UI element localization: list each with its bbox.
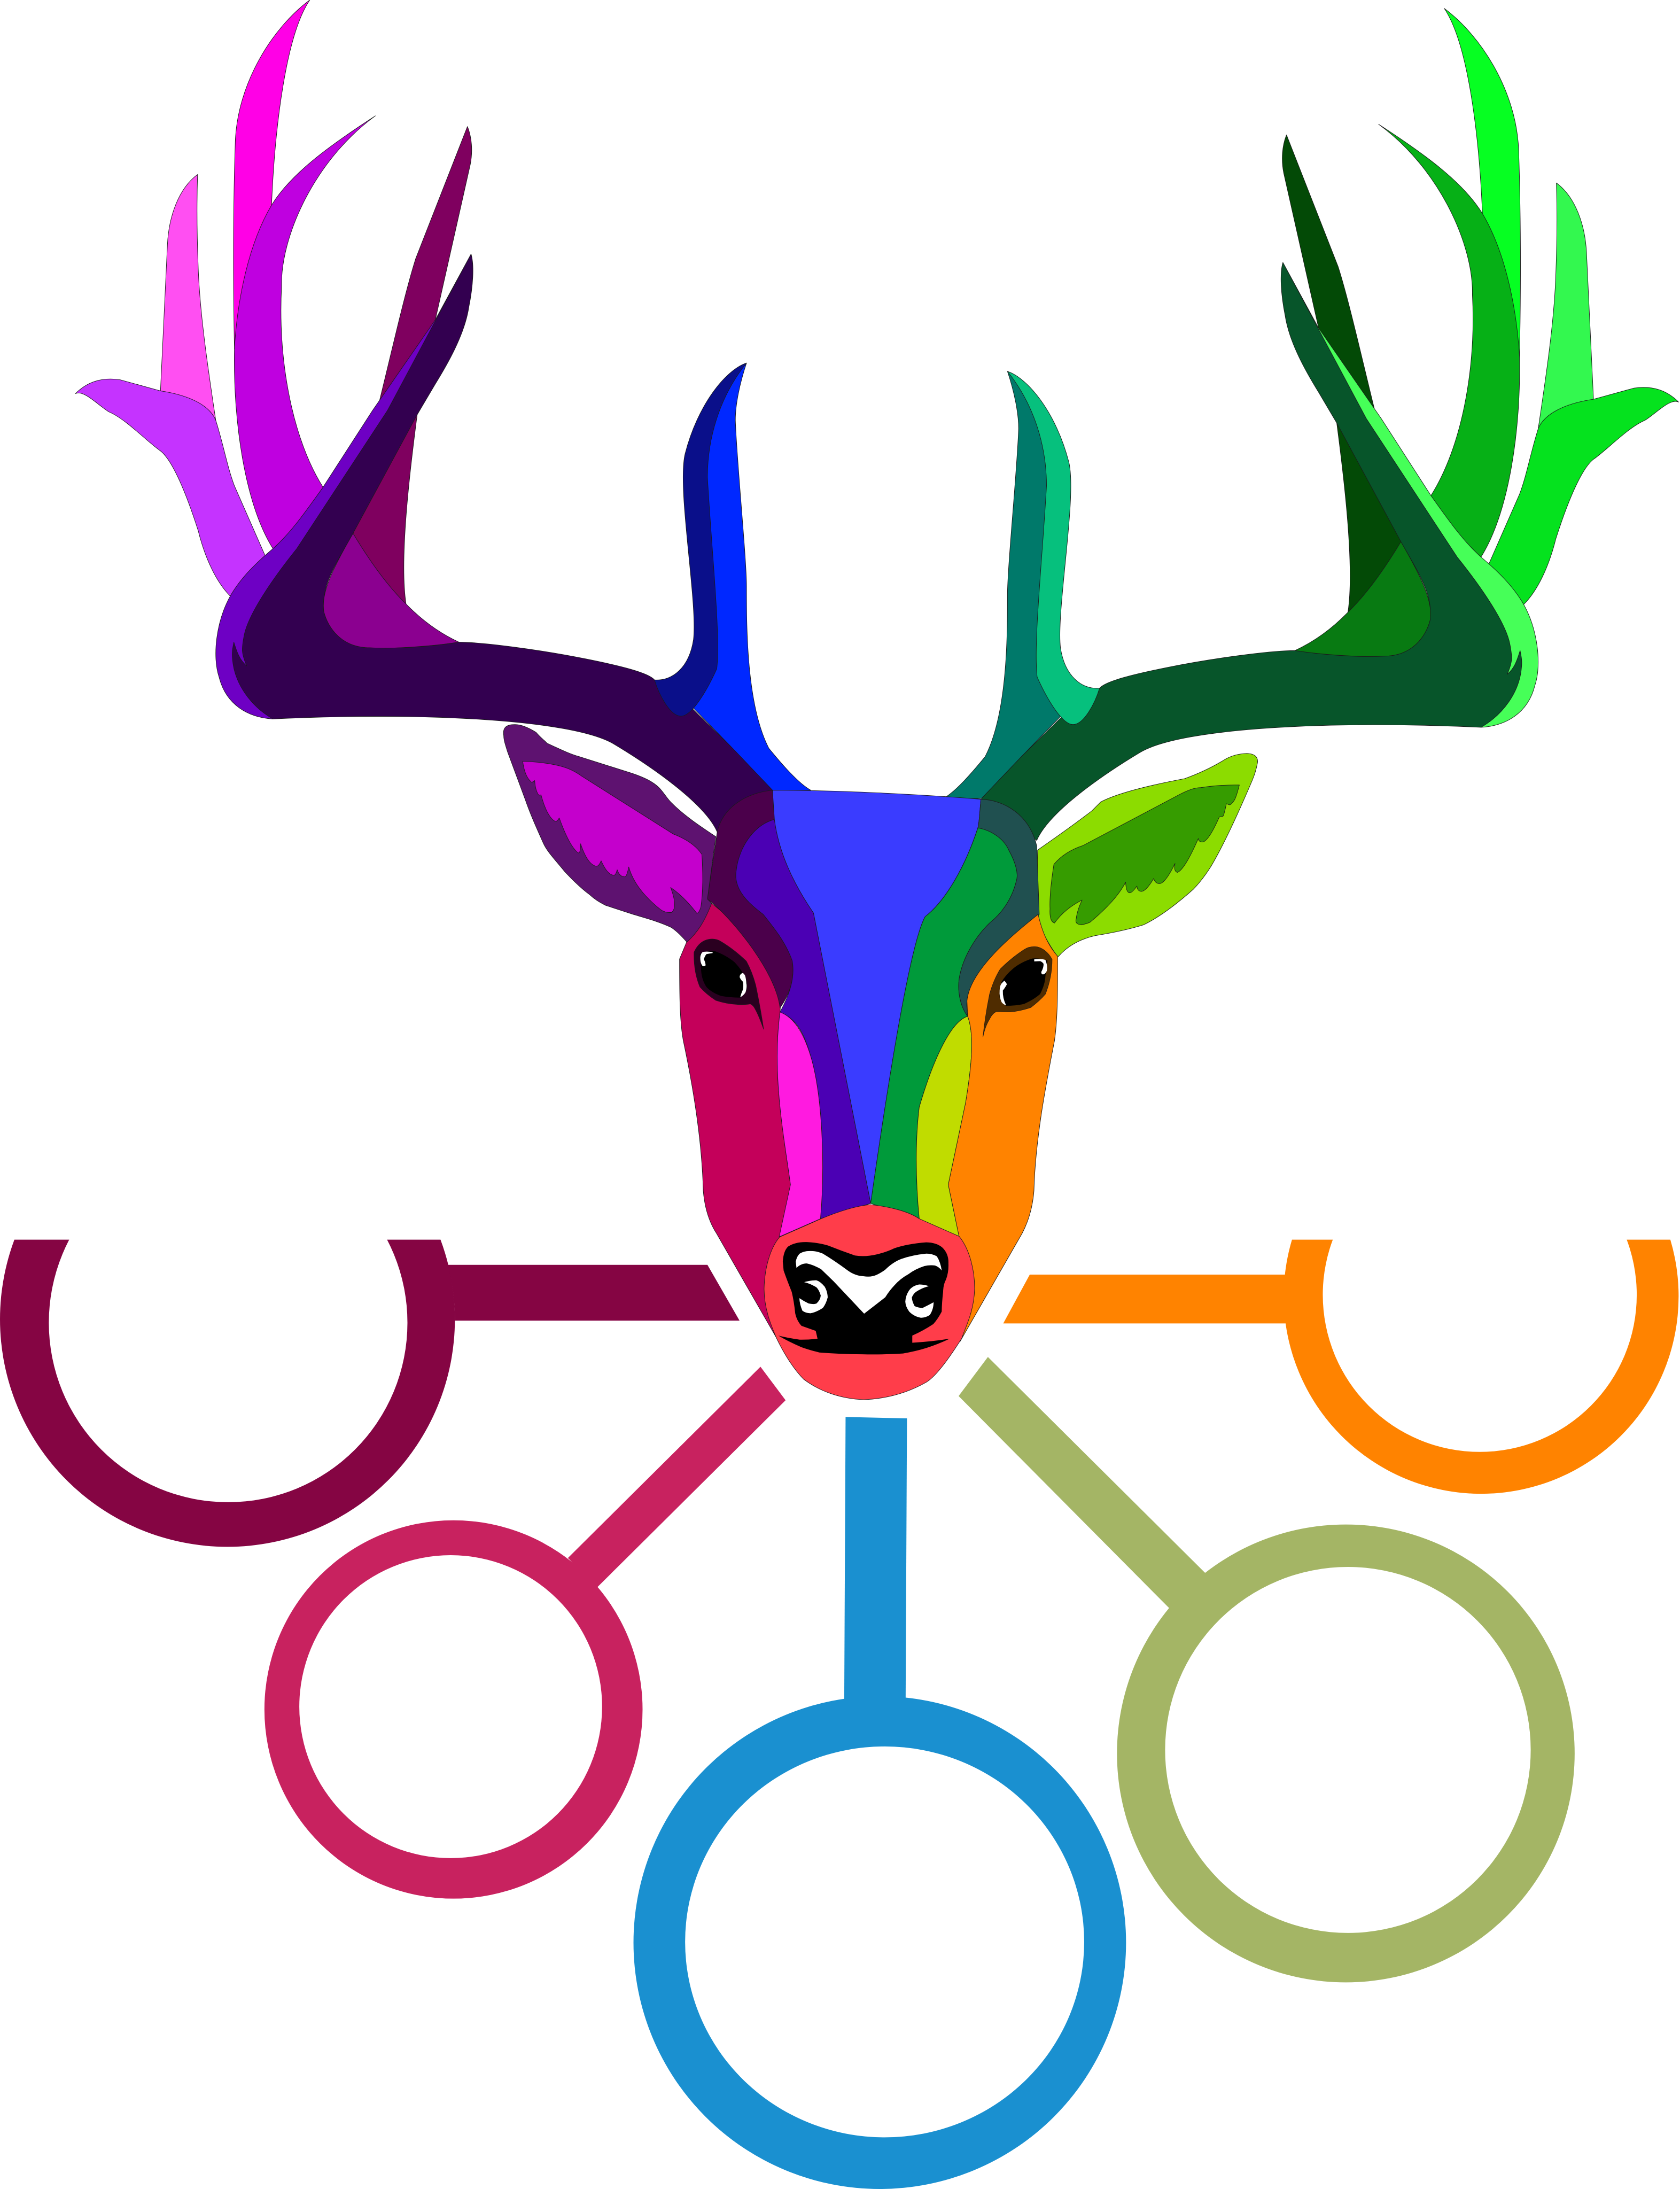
beam edge: [1283, 262, 1538, 727]
right cheek: [948, 914, 1057, 1341]
left eye: [694, 939, 764, 1029]
nose bridge: [773, 790, 981, 1204]
glint: [1034, 959, 1047, 974]
right nose side: [916, 1016, 971, 1237]
eyeball: [1000, 958, 1047, 1006]
tine: lilac: [75, 379, 272, 596]
ring connector: blue: [634, 1417, 1126, 2189]
ring connector: maroon: [0, 1240, 740, 1547]
antler web: [1295, 542, 1430, 656]
right muzzle stripe: [870, 828, 1017, 1218]
right eye: [983, 946, 1052, 1037]
brow tine: [943, 371, 1070, 798]
right antler: [943, 9, 1678, 841]
ear outer: [1037, 754, 1257, 957]
brow tine shade: [1007, 371, 1100, 725]
tine: pink: [160, 175, 216, 420]
glint: [1000, 981, 1007, 1005]
main beam: [232, 254, 773, 832]
tine: plum: [353, 127, 472, 621]
nose: [779, 1242, 950, 1354]
tine: light green: [1538, 183, 1593, 429]
right brow: [959, 799, 1039, 1016]
right ear: [1037, 754, 1257, 957]
glint: [740, 973, 746, 997]
tine: magenta: [234, 0, 310, 349]
tine: green: [1379, 124, 1520, 557]
tine: vivid green: [1482, 387, 1678, 604]
brow tine shade: [655, 363, 746, 716]
eyeball: [700, 951, 747, 998]
left cheek: [680, 903, 795, 1341]
beam edge: [216, 254, 471, 719]
eye socket: [983, 946, 1052, 1037]
left antler: [75, 0, 811, 832]
deer face: [680, 790, 1057, 1400]
nose highlight: [796, 1251, 942, 1314]
left nose side: [777, 1012, 823, 1237]
ear inner: [1050, 785, 1239, 925]
ear outer: [503, 725, 716, 943]
tine: violet: [234, 116, 375, 549]
left nostril highlight: [799, 1280, 828, 1313]
ring connector: olive: [959, 1357, 1575, 1982]
ring connector: orange: [1004, 1240, 1679, 1494]
tine: bright green: [1444, 9, 1520, 358]
left ear: [503, 725, 716, 943]
glint: [700, 952, 713, 966]
main beam: [982, 262, 1522, 841]
ring connector: crimson: [265, 1367, 785, 1899]
brow tine: [684, 363, 811, 790]
nostrils and mouth: [779, 1242, 950, 1354]
eye socket: [694, 939, 764, 1029]
left brow: [707, 790, 793, 1008]
tine: dark green: [1282, 135, 1401, 630]
ear inner: [523, 761, 703, 913]
antler web: [323, 533, 459, 648]
muzzle: [764, 1205, 975, 1400]
left muzzle stripe: [736, 819, 870, 1218]
right nostril highlight: [905, 1285, 934, 1318]
